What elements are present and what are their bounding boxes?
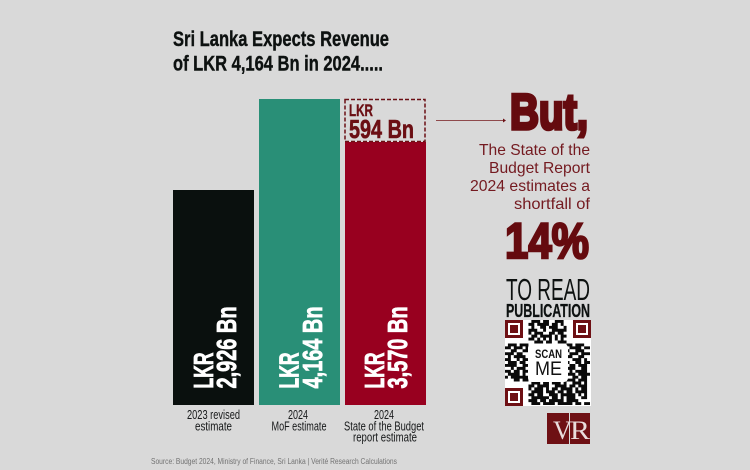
bar label: 2024 MoF estimate [272,408,327,434]
bar value: LKR 4,164 Bn [274,306,328,388]
big number: 14%: 14% [505,213,589,269]
title: Sri Lanka Expects Revenue [173,28,389,51]
QR code [505,320,591,406]
callout text: Budget Report [489,160,591,177]
bar label: 2024 State of the Budget report estimate: State of the Budget [344,420,424,434]
bar value: LKR 2,926 Bn: 2,926 Bn [211,306,242,388]
arrow: shortfall to callout [436,118,506,122]
heading: to read publication [506,272,590,321]
callout text: 2024 estimates a [470,178,590,195]
bar label: 2024 MoF estimate: 2024 [288,408,308,422]
QR finder: top left [505,320,523,338]
logo: VR [547,413,591,445]
QR centre label: SCAN [535,349,562,361]
shortfall dashed box: LKR 594 Bn: LKR [349,101,373,120]
callout text: The State of the [479,142,590,159]
bar value: LKR 2,926 Bn [188,306,242,388]
shortfall dashed box: LKR 594 Bn [345,100,425,144]
QR finder: bottom left [505,388,523,406]
heading: But,: But, [510,84,588,140]
bar label: 2024 MoF estimate: MoF estimate [272,420,327,434]
title: of LKR 4,164 Bn in 2024..... [173,52,383,76]
bar label: 2023 revised estimate: estimate [195,420,232,434]
callout text [470,142,591,213]
bar label: 2024 State of the Budget report estimate: 2024 [374,408,394,422]
bar: 2024 State of the Budget estimate [345,142,426,405]
source note: Source: Budget 2024, Ministry of Finance, Sri Lanka | Verité Research Calculations [151,457,397,466]
bar value: LKR 3,570 Bn: LKR [359,352,390,388]
bar label: 2023 revised estimate: 2023 revised [187,408,240,422]
QR centre label: ME [535,359,562,380]
QR centre label [528,344,568,382]
heading: to read publication: TO READ [506,272,590,307]
bar label: 2023 revised estimate [187,408,240,434]
bar label: 2024 State of the Budget report estimate [344,408,424,444]
shortfall dashed box: LKR 594 Bn: 594 Bn [349,114,414,144]
bar value: LKR 4,164 Bn: 4,164 Bn [297,306,328,388]
bar value: LKR 2,926 Bn: LKR [188,352,219,388]
bar label: 2024 State of the Budget report estimate: report estimate [353,430,417,444]
logo: VR: V [553,416,572,445]
bar value: LKR 3,570 Bn [359,306,413,388]
callout text: shortfall of [514,196,591,213]
QR finder: top right [573,320,591,338]
bar value: LKR 4,164 Bn: LKR [274,352,304,388]
bar: 2023 revised estimate [173,190,254,405]
bar: 2024 MoF estimate [259,99,340,405]
title [173,28,389,76]
heading: to read publication: PUBLICATION [506,301,590,321]
bar value: LKR 3,570 Bn: 3,570 Bn [382,306,413,388]
logo: VR: R [570,416,591,445]
